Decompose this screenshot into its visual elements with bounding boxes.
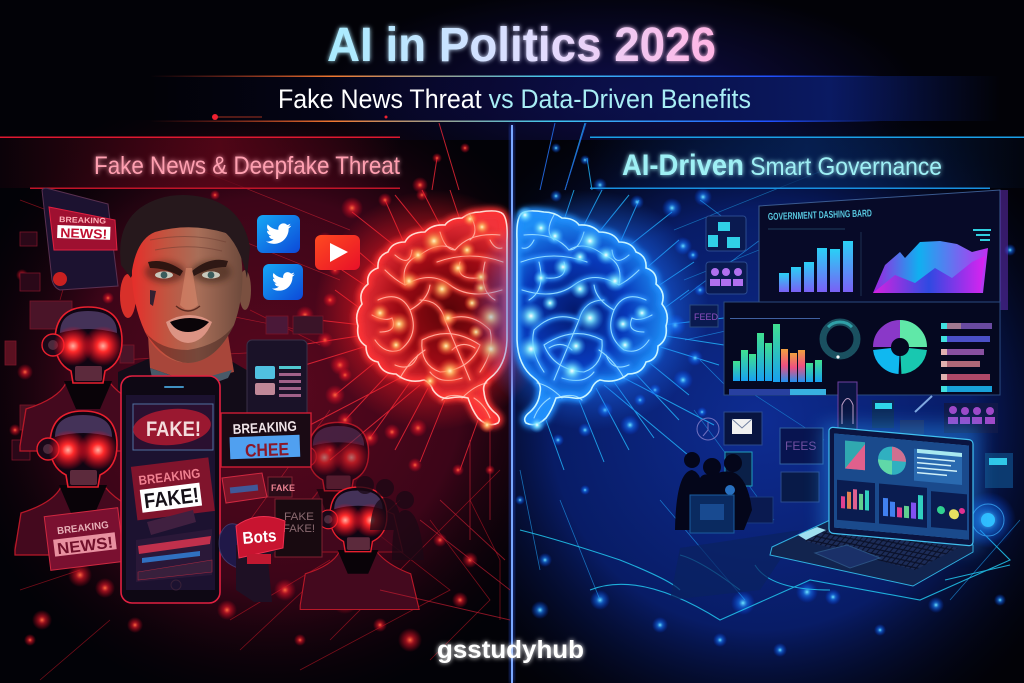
robot: upper left (20, 307, 160, 451)
bar chart: blue (779, 241, 853, 292)
network floor: threat side (380, 430, 510, 620)
governance heading text: AI-Driven Smart Governance (622, 149, 942, 182)
badges: small fake cards: FAKE (271, 483, 295, 493)
main phone (121, 376, 220, 603)
sign: breaking news (44, 508, 124, 570)
data pad (670, 530, 800, 600)
sign text: news: NEWS! (56, 535, 114, 558)
donut chart (882, 329, 918, 365)
circuit floor (520, 530, 1010, 620)
sign: fake panel (275, 499, 322, 557)
robot: bottom right (300, 487, 419, 610)
mid icon row (690, 305, 1013, 523)
left audience silhouettes (356, 476, 424, 560)
phone card: breaking fake (131, 457, 215, 520)
radial gauge (823, 322, 857, 359)
audience silhouettes (675, 452, 752, 533)
arch device (838, 382, 857, 430)
network rays: threat side (9, 123, 500, 680)
subtitle text: Fake News Threat vs Data-Driven Benefits (278, 84, 751, 114)
sign text: breaking: BREAKING (56, 520, 110, 537)
laptop screen: pie (878, 445, 906, 476)
tablet: breaking news (42, 188, 118, 290)
centre divider (510, 125, 514, 683)
laptop screen halo (822, 424, 980, 549)
brain: red hemisphere (315, 190, 555, 433)
portrait: angry politician deepfake (118, 195, 256, 420)
section heading: governance (590, 136, 1024, 189)
sign: fake panel: FAKE (284, 511, 314, 523)
tablet text: news: NEWS! (60, 225, 107, 242)
phone card: breaking fake: FAKE! (143, 484, 200, 513)
area chart (873, 241, 988, 293)
tablet text: breaking: BREAKING (59, 215, 106, 226)
sign text: chee: CHEE (245, 439, 289, 461)
title: AI in Politics 2026 (327, 19, 716, 72)
phone card: breaking fake: BREAKING (138, 466, 201, 488)
social icon: twitter lower (263, 264, 303, 300)
red neural nodes (370, 211, 506, 433)
small phone (247, 340, 307, 425)
network rays: governance side (515, 123, 1020, 657)
laptop base (770, 520, 973, 586)
screen: government dashboard (759, 190, 1008, 310)
laptop screen: chart tile (834, 433, 969, 540)
left icons: org chart and people (706, 216, 747, 294)
dashboard title: GOVERNMENT DASHING BARD (768, 208, 872, 223)
robot: lower left (15, 411, 155, 555)
badges: small fake cards (222, 473, 295, 503)
phone card: fake (132, 404, 213, 450)
laptop (770, 424, 980, 586)
bar chart: green (733, 324, 822, 382)
footer brand: gsstudyhub (437, 636, 584, 664)
screen: analytics (724, 302, 1000, 395)
mid icon row: FEES (785, 439, 816, 453)
bots label: Bots (242, 526, 277, 548)
left small chips (5, 232, 323, 460)
progress bars (941, 323, 992, 392)
subtitle banner (150, 76, 1000, 122)
social icon: youtube (315, 235, 360, 270)
phone card: fake: FAKE! (146, 418, 201, 441)
sign: fake panel: FAKE! (283, 523, 315, 535)
social icon: twitter top (257, 215, 300, 253)
sign: breaking chee (221, 413, 311, 467)
sign text: breaking: BREAKING (232, 418, 297, 437)
glow node: radar circle (960, 492, 1016, 548)
envelope card (724, 412, 762, 445)
bot: bots sign (219, 517, 285, 602)
brain: blue hemisphere (469, 190, 709, 433)
mid icon row: FEED (694, 312, 719, 322)
section heading: threat (0, 136, 400, 189)
threat heading text: Fake News & Deepfake Threat (94, 152, 400, 180)
blue neural nodes (516, 206, 651, 433)
robot: dim right (277, 422, 403, 552)
